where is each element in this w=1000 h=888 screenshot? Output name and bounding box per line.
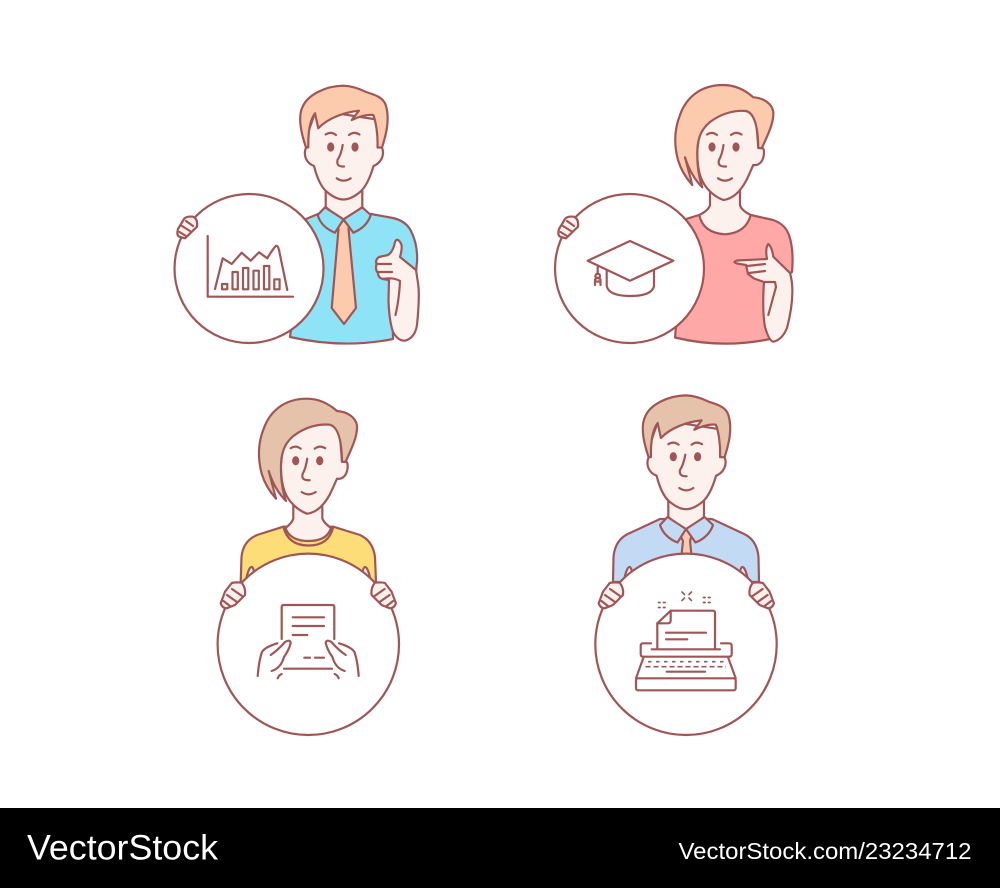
left wrist	[624, 567, 632, 580]
panel: man holding typewriter circle	[595, 395, 777, 735]
left hand	[221, 582, 245, 608]
head and hair	[259, 399, 357, 514]
left hand	[599, 582, 623, 608]
icon: line and bar chart	[208, 236, 293, 297]
tie	[332, 220, 356, 324]
neck	[286, 504, 331, 541]
hand on the circle	[177, 217, 197, 238]
finger lines	[180, 221, 193, 236]
panel: woman pointing with graduation cap	[555, 85, 793, 344]
circle badge	[595, 554, 777, 735]
man torso with blue shirt	[290, 214, 417, 344]
blue shirt	[613, 519, 759, 582]
neck	[699, 188, 751, 234]
circle badge	[174, 194, 324, 343]
yellow shirt	[241, 527, 376, 582]
circle badge	[555, 194, 704, 343]
hand on the circle	[558, 217, 578, 238]
neck	[668, 498, 704, 532]
right hand	[371, 582, 396, 608]
neck	[326, 188, 362, 222]
outer neckline	[283, 527, 333, 546]
small tie	[680, 529, 692, 560]
footer image url text: VectorStock.com/23234712	[678, 838, 972, 864]
panel: man with thumbs up and chart	[174, 86, 419, 344]
left wrist	[246, 567, 254, 580]
circle badge	[218, 554, 399, 735]
right wrist	[363, 567, 371, 580]
head	[300, 86, 388, 200]
shirt collar	[660, 517, 713, 542]
icon: typewriter	[636, 592, 736, 690]
head	[643, 395, 730, 509]
shirt collar	[318, 207, 371, 233]
footer bar	[0, 808, 1000, 888]
panel: woman holding document circle	[218, 399, 399, 735]
thumbs-up hand and arm	[376, 240, 419, 341]
finger lines	[560, 221, 574, 236]
head and hair	[675, 85, 773, 200]
pointing finger lines	[747, 264, 776, 315]
thumbs-up finger lines	[377, 264, 400, 315]
woman torso with pink shirt	[675, 215, 793, 344]
icon: document in hands	[258, 605, 359, 678]
icon: graduation cap	[588, 241, 673, 296]
footer logo text: VectorStock	[27, 828, 219, 868]
right wrist	[740, 567, 748, 580]
right hand	[749, 582, 774, 608]
pointing hand and arm	[734, 244, 792, 342]
